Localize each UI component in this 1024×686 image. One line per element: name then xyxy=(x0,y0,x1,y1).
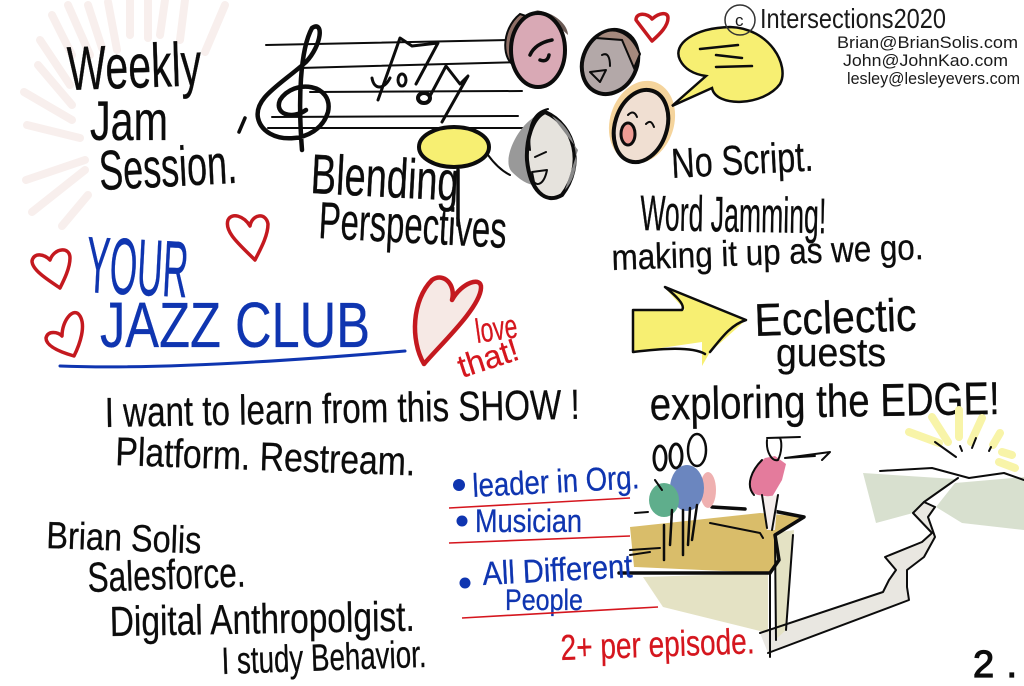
list: guest types: People xyxy=(505,584,583,617)
text: copyright and emails xyxy=(725,3,1020,88)
icon: face four xyxy=(508,109,578,198)
text: eclectic guests exploring the edge xyxy=(649,288,1000,430)
icon: small yellow speech bubble xyxy=(419,127,510,175)
heading: your jazz club: JAZZ CLUB xyxy=(100,289,370,361)
text: love that xyxy=(453,307,523,385)
text: i want to learn from this show xyxy=(104,381,580,484)
text: eclectic guests exploring the edge: guests xyxy=(776,331,886,375)
text: 2+ per episode: 2+ per episode. xyxy=(560,620,755,668)
heading: weekly jam session: Weekly xyxy=(66,30,202,104)
text: brian solis bio: Digital Anthropolgist. xyxy=(109,593,415,645)
icon: face two xyxy=(572,21,648,103)
text: i want to learn from this show: I want to learn from this SHOW ! xyxy=(104,381,580,436)
text: copyright and emails: John@JohnKao.com xyxy=(843,51,1008,70)
text: i want to learn from this show: Platform. Restream. xyxy=(115,430,416,484)
icon: pointing figure xyxy=(749,437,830,530)
heading: your jazz club xyxy=(60,220,405,367)
heading: your jazz club: YOUR xyxy=(84,220,191,314)
icon: comma mark xyxy=(239,118,245,132)
list: guest types: leader in Org. xyxy=(471,458,640,504)
list: guest types: Musician xyxy=(475,503,582,539)
icon: face three xyxy=(599,72,685,172)
text: copyright and emails: c xyxy=(735,11,744,30)
icon: big red heart xyxy=(415,278,481,364)
text: no script word jamming: No Script. xyxy=(670,133,814,187)
heading: weekly jam session xyxy=(66,30,238,202)
icon: yellow speech bubble with lines xyxy=(672,27,783,106)
icon: yellow arrow xyxy=(633,287,746,366)
text: no script word jamming xyxy=(611,133,924,278)
text: blending perspectives: Blending xyxy=(309,142,460,213)
text: copyright and emails: Intersections2020 xyxy=(760,3,946,34)
text: brian solis bio: I study Behavior. xyxy=(221,634,427,683)
icons: red hearts left xyxy=(32,216,268,356)
icon: pale rays around weekly jam session xyxy=(24,0,225,226)
icon: listeners group xyxy=(635,434,716,560)
text: copyright and emails: Brian@BrianSolis.com xyxy=(837,33,1018,52)
text: blending perspectives xyxy=(309,142,508,260)
text: brian solis bio: Salesforce. xyxy=(87,549,246,601)
text: no script word jamming: making it up as we go. xyxy=(611,226,924,278)
heading: weekly jam session: Session. xyxy=(97,132,238,202)
text: no script word jamming: Word Jamming! xyxy=(640,185,827,244)
icon: spark ticks xyxy=(935,438,991,457)
icon: face one xyxy=(505,10,568,87)
text: page number: 2. xyxy=(973,644,1017,686)
icon: small heart xyxy=(636,14,668,41)
icon: yellow rays at edge xyxy=(909,410,1015,468)
text: brian solis bio xyxy=(46,515,427,683)
list: guest types xyxy=(449,458,658,618)
list: guest types: All Different xyxy=(481,547,633,592)
text: love that: that! xyxy=(453,331,523,385)
icon: music staff with treble clef and notes xyxy=(258,26,530,150)
text: brian solis bio: Brian Solis xyxy=(46,515,202,562)
text: blending perspectives: Perspectives xyxy=(317,192,508,260)
illustration: cliff and path xyxy=(619,468,1024,657)
heading: weekly jam session: Jam xyxy=(90,89,168,152)
text: love that: love xyxy=(473,307,520,351)
text: eclectic guests exploring the edge: Ecclectic xyxy=(754,288,917,346)
